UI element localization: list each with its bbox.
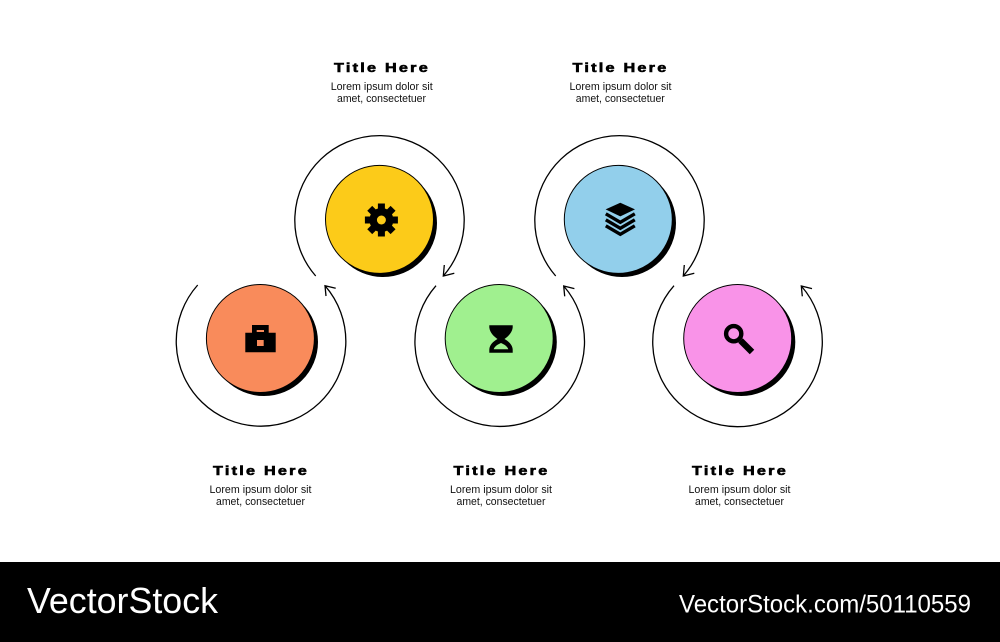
arrow ring: pink step	[653, 286, 822, 427]
icon: hourglass	[489, 325, 513, 353]
description line 2: orange step: amet, consectetuer	[216, 496, 305, 508]
circle shadow: orange step	[210, 288, 318, 396]
circle shadow: yellow step	[329, 169, 437, 277]
circle: orange step	[206, 284, 314, 392]
title: orange step: Title Here	[213, 463, 309, 478]
description: yellow step: Lorem ipsum dolor sit	[331, 81, 433, 93]
step 3: green hourglass	[415, 284, 585, 496]
circle: green step	[445, 284, 553, 392]
description: green step: Lorem ipsum dolor sit	[450, 484, 552, 496]
circle shadow: pink step	[687, 288, 795, 396]
title: green step: Title Here	[454, 463, 550, 478]
arrow ring: green step	[415, 286, 585, 426]
description: pink step: Lorem ipsum dolor sit	[688, 484, 790, 496]
circle shadow: blue step	[568, 169, 676, 277]
icon: gear	[365, 204, 398, 236]
description: orange step: Lorem ipsum dolor sit	[210, 484, 312, 496]
title: pink step: Title Here	[692, 463, 788, 478]
footer image id: VectorStock.com/50110559	[679, 591, 971, 619]
footer bar	[0, 562, 1000, 642]
description line 2: blue step: amet, consectetuer	[576, 93, 665, 105]
title: yellow step: Title Here	[334, 60, 430, 75]
description line 2: green step: amet, consectetuer	[456, 496, 546, 508]
circle: pink step	[684, 284, 792, 392]
circle shadow: green step	[449, 288, 557, 396]
description line 2: yellow step: amet, consectetuer	[337, 93, 426, 105]
footer logo text: VectorStock	[27, 580, 219, 621]
description: blue step: Lorem ipsum dolor sit	[570, 81, 672, 93]
circle: yellow step	[326, 165, 434, 273]
icon: magnifier	[726, 326, 752, 352]
step 4: blue layers	[535, 60, 704, 277]
arrow ring: yellow step	[295, 136, 464, 276]
arrow ring: orange step	[176, 285, 346, 426]
step 2: yellow gear	[295, 60, 464, 277]
circle: blue step	[564, 165, 672, 273]
arrow ring: blue step	[535, 136, 704, 276]
step 5: pink magnifier	[653, 284, 822, 496]
icon: layers	[606, 203, 635, 234]
description line 2: pink step: amet, consectetuer	[695, 496, 784, 508]
title: blue step: Title Here	[572, 60, 668, 75]
step 1: orange briefcase	[176, 284, 346, 496]
icon: briefcase	[245, 325, 276, 352]
